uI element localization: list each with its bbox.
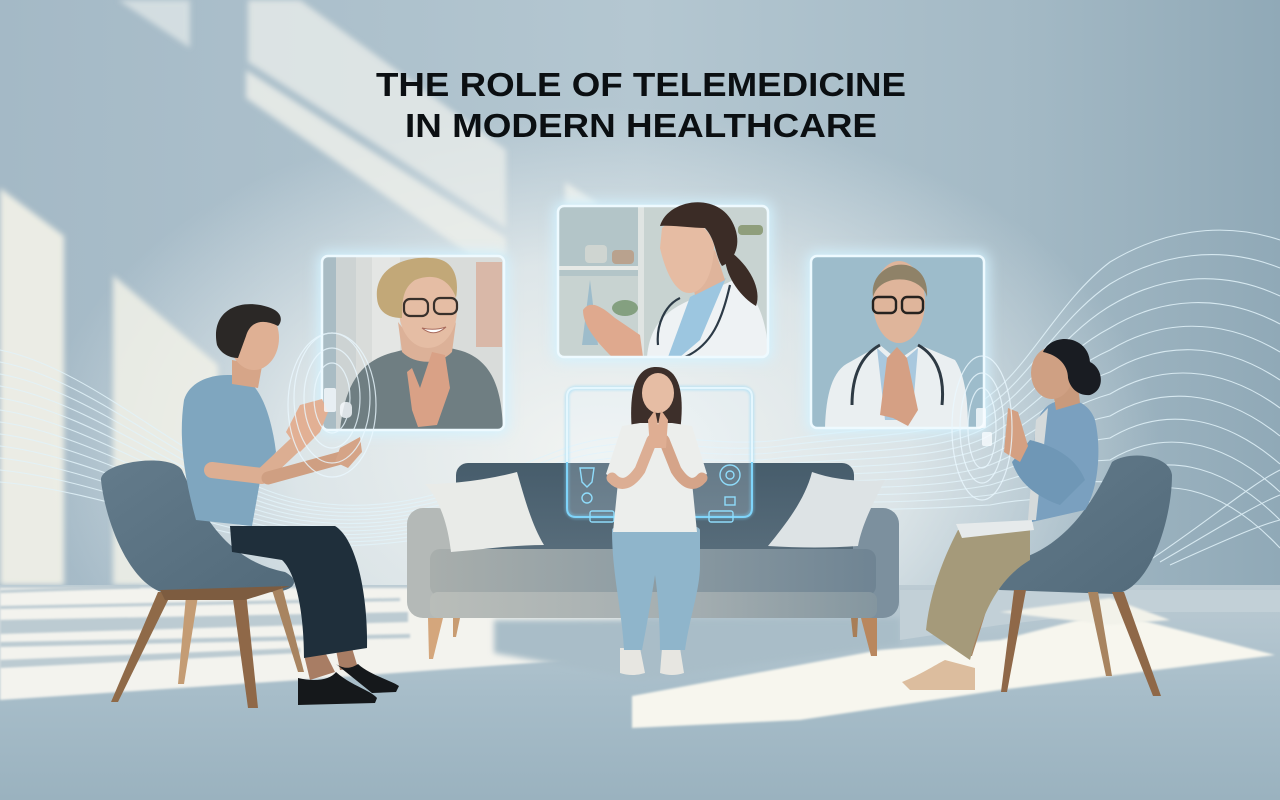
woman on sofa [606,367,707,675]
video panel: older woman [318,252,508,434]
right chair [968,456,1172,696]
right hologram ripple rings [952,356,1012,500]
sunlight patches on wall [0,0,600,585]
cushion left [425,472,544,552]
title line 2: IN MODERN HEALTHCARE [405,108,877,145]
left chair [101,461,304,708]
left hologram ripple rings [288,333,376,477]
man in blue t-shirt [182,304,399,705]
floor [0,585,1280,800]
video panel: male doctor [807,252,988,432]
room background: wall [0,0,1280,590]
holographic tablet panel [567,388,752,522]
woman on right [902,339,1101,690]
cushion right [768,472,885,548]
sofa leg left [428,618,443,659]
video panel: female doctor [554,202,772,361]
sofa [407,463,899,659]
title: THE ROLE OF TELEMEDICINE [376,67,906,104]
sofa leg right [861,618,877,656]
data wave lines [0,230,1280,565]
